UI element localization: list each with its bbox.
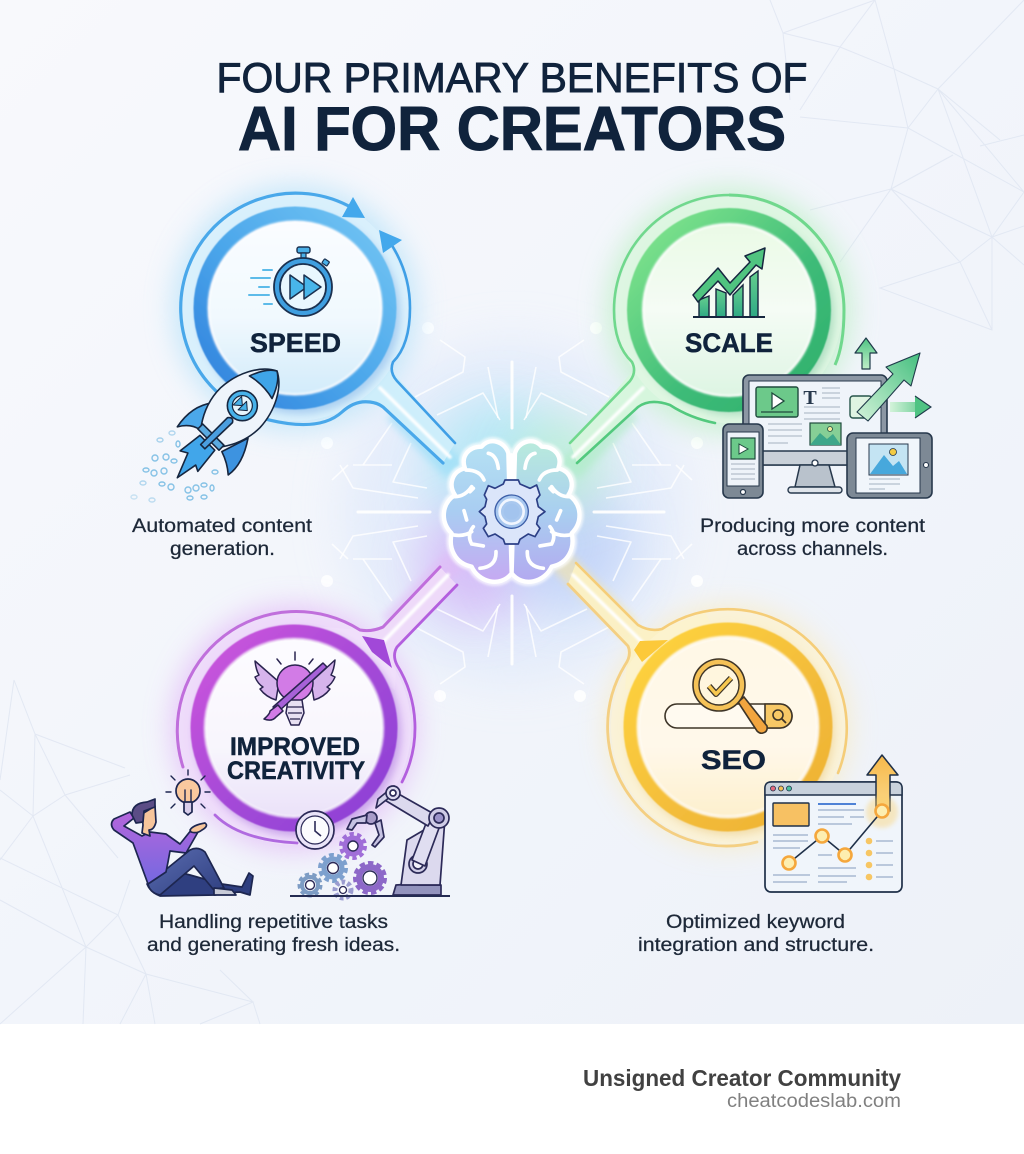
central hub glow and circuit lines: [321, 322, 703, 702]
seo glow: [608, 607, 848, 847]
heading: improved creativity: [227, 733, 365, 785]
title: [216, 54, 808, 164]
panel: scale: [570, 188, 932, 498]
illustration: relaxing person with idea: [112, 770, 253, 896]
creativity glow: [172, 606, 416, 850]
scale ring: [634, 215, 834, 415]
monitor: [743, 375, 887, 493]
panel: improved creativity: [112, 560, 457, 898]
caption: seo: Optimized keyword: [666, 912, 845, 933]
footer credit: [583, 1065, 901, 1112]
caption: improved creativity: [147, 912, 400, 956]
panel: seo: [560, 560, 902, 892]
icon: rocket: [131, 348, 305, 502]
footer credit: Unsigned Creator Community: [583, 1065, 901, 1091]
caption: speed: Automated content: [132, 516, 313, 537]
caption: seo: [638, 912, 874, 956]
caption: scale: [700, 516, 926, 560]
speed connector: [181, 193, 455, 470]
monitor: T: [803, 387, 817, 409]
tablet: [847, 433, 932, 498]
icon: stopwatch: [249, 247, 332, 316]
caption: speed: generation.: [170, 539, 275, 560]
creativity ring: [195, 630, 401, 836]
up arrow: [855, 338, 877, 369]
clock: [296, 811, 334, 849]
illustration: browser with rising chart: [765, 755, 902, 892]
speed glow: [173, 186, 417, 430]
diagonal growth arrow: [857, 353, 920, 421]
icon: winged bulb and brush: [255, 652, 335, 725]
title: AI FOR CREATORS: [238, 95, 786, 164]
lightbulb idea: [166, 770, 210, 815]
caption: speed: [132, 516, 313, 560]
heading: speed: SPEED: [250, 328, 341, 358]
creativity connector: [177, 560, 457, 845]
gears: [300, 835, 384, 898]
scale glow: [607, 188, 851, 432]
heading: improved creativity: IMPROVED: [230, 733, 360, 761]
panel: speed: [131, 186, 455, 502]
title: FOUR PRIMARY BENEFITS OF: [216, 54, 808, 101]
phone: [723, 424, 763, 498]
caption: improved creativity: Handling repetitive tasks: [159, 912, 388, 933]
caption: improved creativity: and generating fresh ideas.: [147, 935, 400, 956]
heading: scale: SCALE: [685, 328, 773, 358]
brain: [444, 441, 579, 582]
robot arm: [347, 786, 449, 895]
heading: seo: SEO: [701, 745, 766, 775]
scale connector: [570, 195, 844, 470]
icon: growth chart: [693, 248, 765, 317]
footer band: [0, 1024, 1024, 1154]
caption: scale: Producing more content: [700, 516, 926, 537]
seo ring: [628, 629, 834, 835]
illustration: robot arm with clock and gears: [290, 786, 450, 898]
caption: seo: integration and structure.: [638, 935, 874, 956]
caption: scale: across channels.: [737, 539, 888, 560]
right arrow: [890, 396, 931, 418]
icon: devices: [723, 338, 932, 498]
central brain with gear: [444, 441, 579, 582]
footer credit: cheatcodeslab.com: [727, 1091, 901, 1112]
seo connector: [560, 560, 847, 846]
arrowheads: [342, 197, 365, 218]
heading: improved creativity: CREATIVITY: [227, 757, 365, 785]
gear: [479, 480, 545, 544]
icon: search bar with magnifier: [665, 659, 792, 733]
speed ring: [200, 214, 400, 414]
